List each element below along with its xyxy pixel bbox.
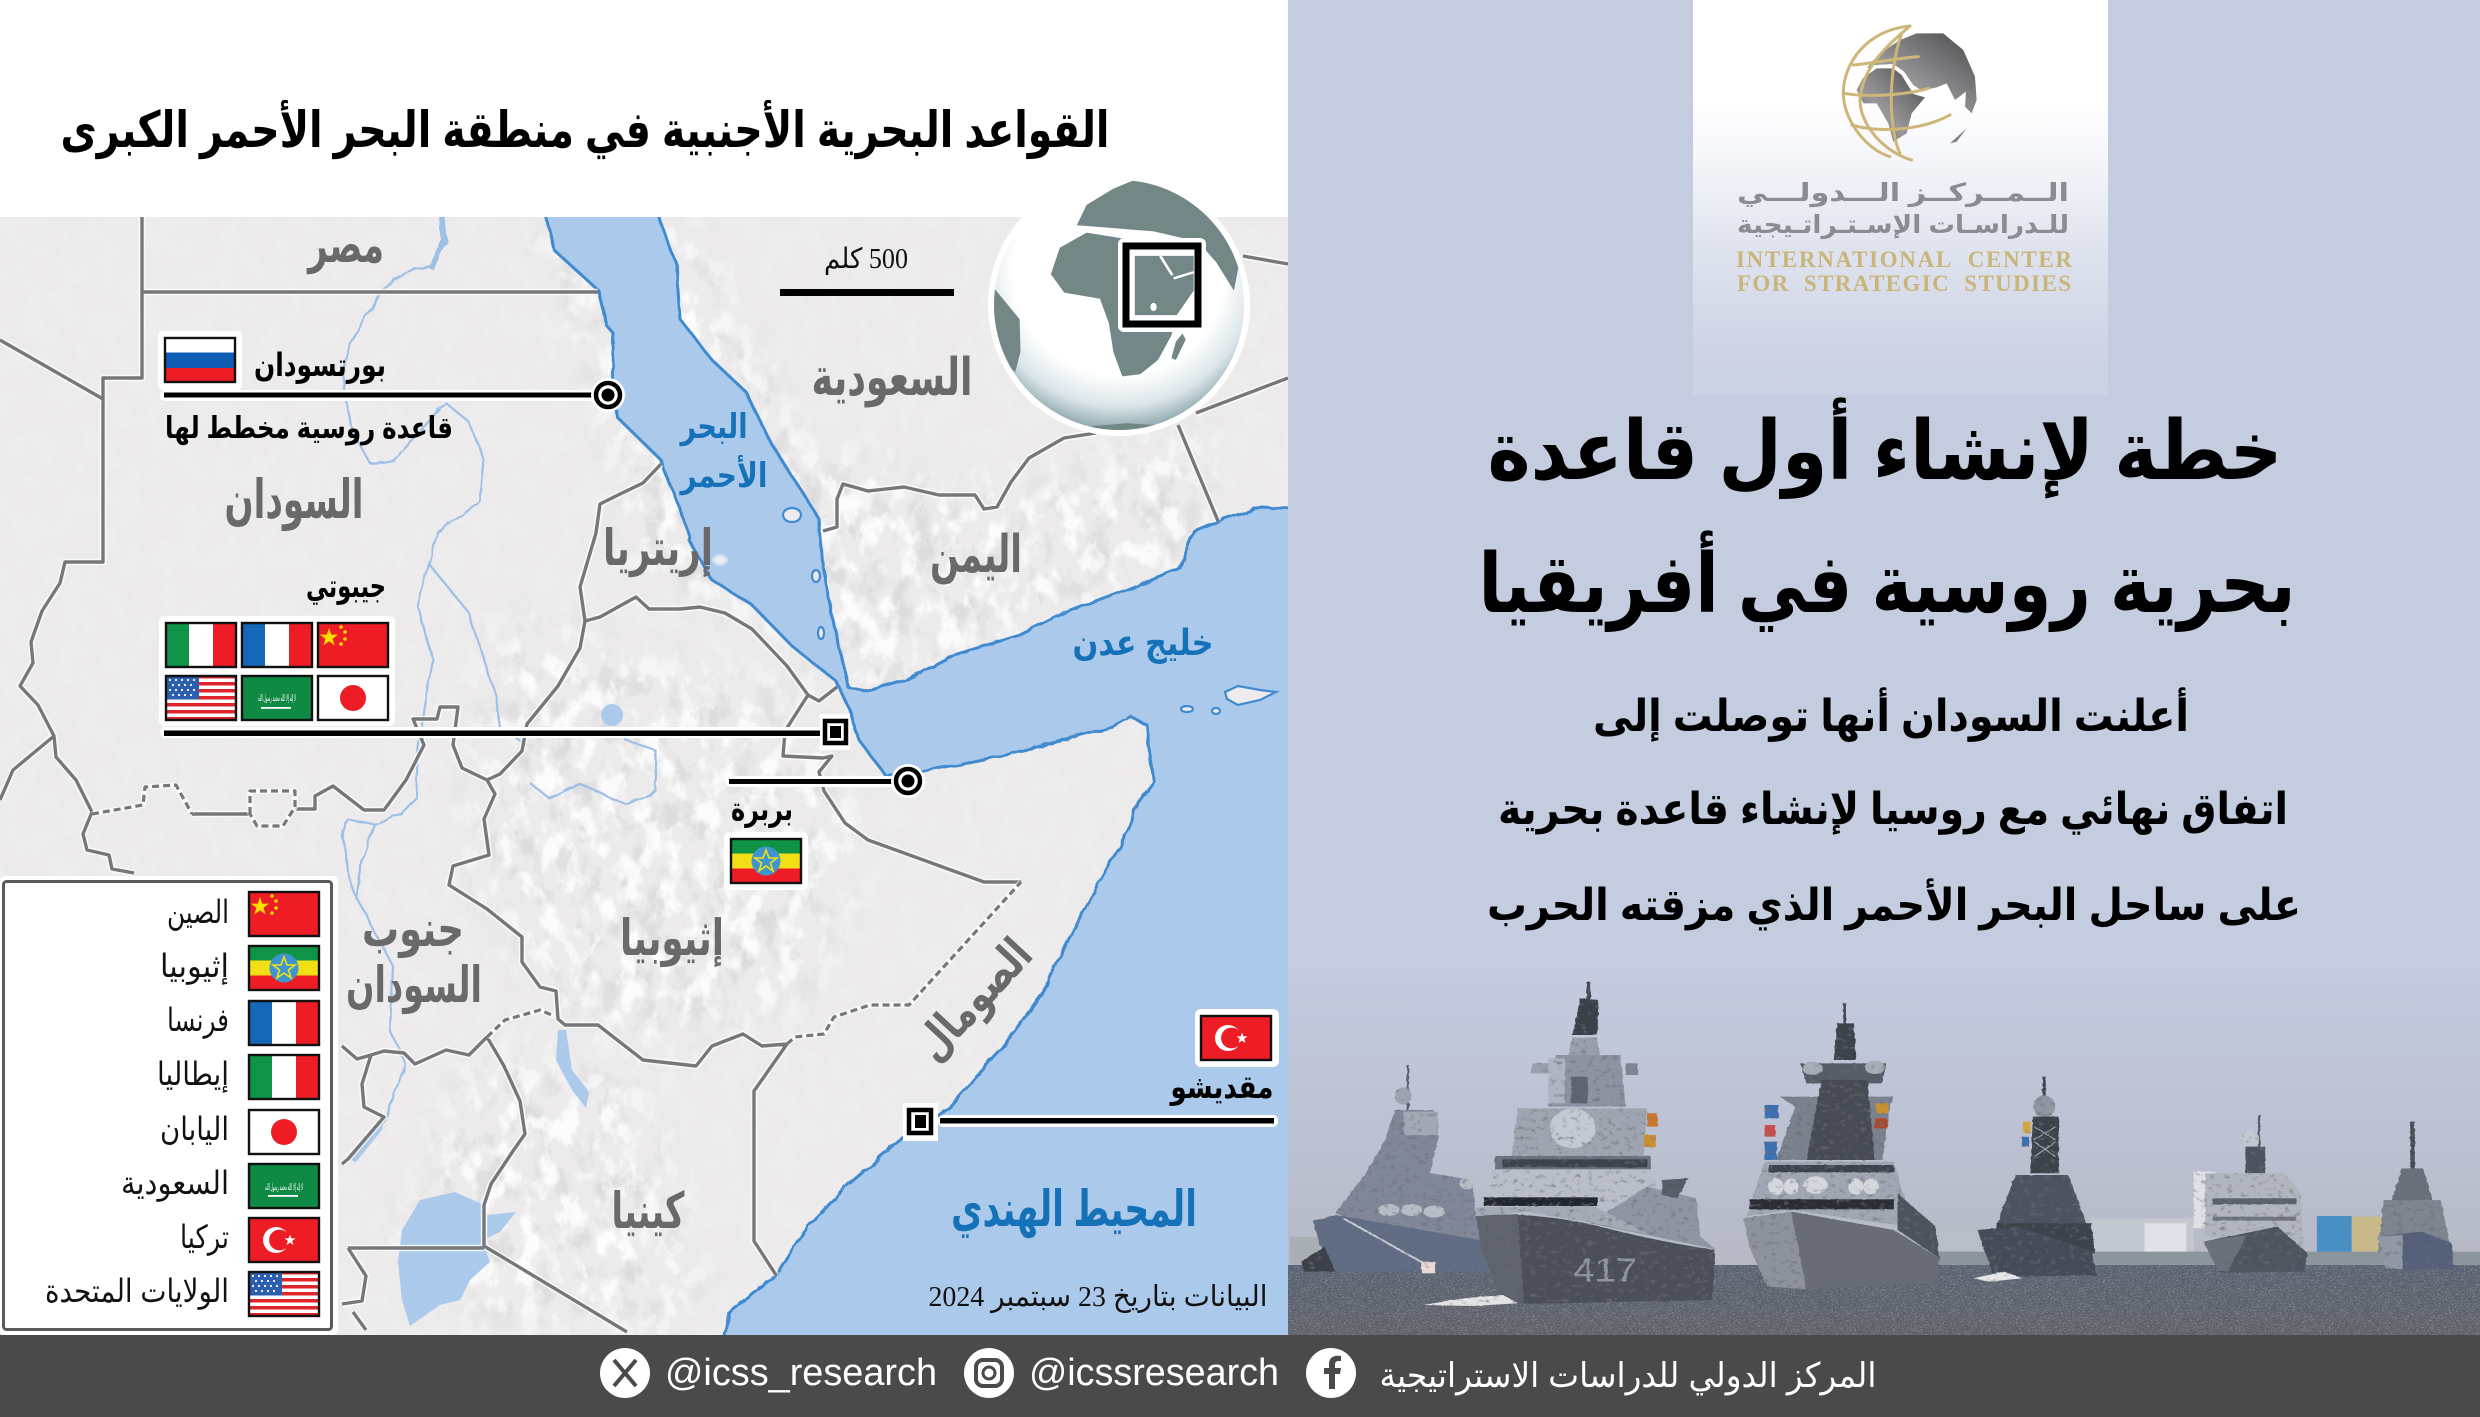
icon: X bbox=[600, 1348, 650, 1398]
legend: إثيوبيا bbox=[160, 948, 229, 985]
lakes bbox=[348, 704, 623, 1326]
ship 3 bbox=[1743, 1003, 1939, 1290]
callout: Djibouti bbox=[159, 568, 850, 750]
X handle: @icss_research bbox=[665, 1352, 937, 1394]
title: القواعد البحرية الأجنبية في منطقة البحر الأحمر الكبرى bbox=[60, 99, 1110, 160]
ship 1 bbox=[1301, 1065, 1489, 1273]
legend: إيطاليا bbox=[157, 1056, 229, 1093]
headline bbox=[1478, 397, 2296, 633]
islands bbox=[713, 508, 1276, 714]
country borders bbox=[0, 217, 1288, 1332]
logo: Arabic name bbox=[1737, 179, 2069, 240]
subheading text: اتفاق نهائي مع روسيا لإنشاء قاعدة بحرية bbox=[1498, 785, 2288, 835]
labels: countries bbox=[224, 217, 1043, 1239]
logo: Arabic name: الــمــركــز الـــدولـــي bbox=[1737, 179, 2069, 208]
callout: Port Sudan: قاعدة روسية مخطط لها bbox=[165, 412, 453, 446]
legend: فرنسا bbox=[167, 1002, 229, 1039]
ship 2 bbox=[1423, 982, 1715, 1306]
logo: English name: FOR STRATEGIC STUDIES bbox=[1737, 271, 2071, 296]
footer bar bbox=[0, 1335, 2480, 1417]
subheading text: أعلنت السودان أنها توصلت إلى bbox=[1593, 687, 2189, 742]
legend: تركيا bbox=[180, 1219, 229, 1256]
label: South Sudan: السودان bbox=[346, 957, 482, 1015]
inset globe locator bbox=[988, 172, 1250, 438]
label: Yemen: اليمن bbox=[930, 526, 1022, 585]
Instagram handle: @icssresearch bbox=[1029, 1352, 1279, 1394]
callout: Djibouti: جيبوتي bbox=[306, 568, 386, 605]
legend: لا إله إلا الله محمد رسول الله bbox=[265, 1182, 303, 1193]
sea: Red Sea, Gulf of Aden, Indian Ocean bbox=[545, 210, 1300, 1345]
label: Egypt: مصر bbox=[306, 217, 384, 275]
callout: Mogadishu: مقديشو bbox=[1169, 1069, 1274, 1106]
panel: map bbox=[0, 210, 1300, 1345]
ship 5 bbox=[2194, 1115, 2308, 1273]
label: Somalia: الصومال bbox=[904, 928, 1043, 1071]
callout: Berbera: بربرة bbox=[731, 791, 793, 828]
label: Red Sea: الأحمر bbox=[679, 454, 768, 496]
callout: Port Sudan: بورتسودان bbox=[254, 347, 386, 384]
legend bbox=[0, 876, 338, 1335]
scale bar: 500 كلم bbox=[824, 244, 908, 275]
rivers bbox=[342, 217, 656, 1126]
label: Sudan: السودان bbox=[224, 470, 364, 531]
icon: Facebook bbox=[1306, 1348, 1356, 1398]
legend: السعودية bbox=[121, 1165, 229, 1202]
ship 4 bbox=[1974, 1077, 2097, 1282]
logo panel bbox=[1693, 0, 2108, 395]
logo: English name bbox=[1736, 247, 2072, 296]
label: Red Sea: البحر bbox=[679, 408, 748, 447]
Facebook name: المركز الدولي للدراسات الاستراتيجية bbox=[1380, 1357, 1876, 1396]
subheading text: على ساحل البحر الأحمر الذي مزقته الحرب bbox=[1487, 878, 2301, 931]
logo: Arabic name: للـدراسـات الإسـتـراتـيجية bbox=[1737, 211, 2069, 240]
label: Ethiopia: إثيوبيا bbox=[620, 910, 724, 968]
legend: الصين bbox=[167, 894, 229, 931]
legend: الولايات المتحدة bbox=[45, 1273, 229, 1310]
logo: globe bbox=[1843, 26, 1977, 160]
legend: اليابان bbox=[160, 1111, 229, 1147]
label: Indian Ocean: المحيط الهندي bbox=[951, 1181, 1197, 1239]
callout: Port Sudan bbox=[158, 331, 625, 446]
photo: naval ships bbox=[1286, 960, 2480, 1337]
callout: Berbera bbox=[724, 764, 925, 890]
labels: seas bbox=[679, 408, 1214, 1239]
label: Gulf of Aden: خليج عدن bbox=[1072, 622, 1214, 664]
icon: Instagram bbox=[964, 1348, 1014, 1398]
label: South Sudan bbox=[348, 922, 480, 1014]
scale bar bbox=[780, 244, 954, 296]
ship 2: 417 bbox=[1574, 1252, 1637, 1289]
callout: Mogadishu bbox=[903, 1009, 1279, 1141]
label: Kenya: كينيا bbox=[612, 1183, 685, 1239]
water bbox=[1286, 1265, 2480, 1337]
title band bbox=[0, 0, 1288, 217]
subheading text bbox=[1487, 687, 2301, 931]
label: Saudi Arabia: السعودية bbox=[812, 349, 972, 408]
headline: بحرية روسية في أفريقيا bbox=[1478, 530, 2296, 633]
data date note: البيانات بتاريخ 23 سبتمبر 2024 bbox=[929, 1281, 1268, 1313]
headline: خطة لإنشاء أول قاعدة bbox=[1488, 397, 2282, 500]
label: Eritrea: إريتريا bbox=[603, 520, 713, 578]
label: Red Sea bbox=[679, 408, 768, 496]
shore buildings bbox=[1290, 1216, 2480, 1267]
logo: English name: INTERNATIONAL CENTER bbox=[1736, 247, 2072, 272]
ship 6 bbox=[2378, 1122, 2454, 1269]
label: South Sudan: جنوب bbox=[362, 901, 464, 959]
callout: Djibouti: لا إله إلا الله محمد رسول الله bbox=[258, 693, 296, 704]
